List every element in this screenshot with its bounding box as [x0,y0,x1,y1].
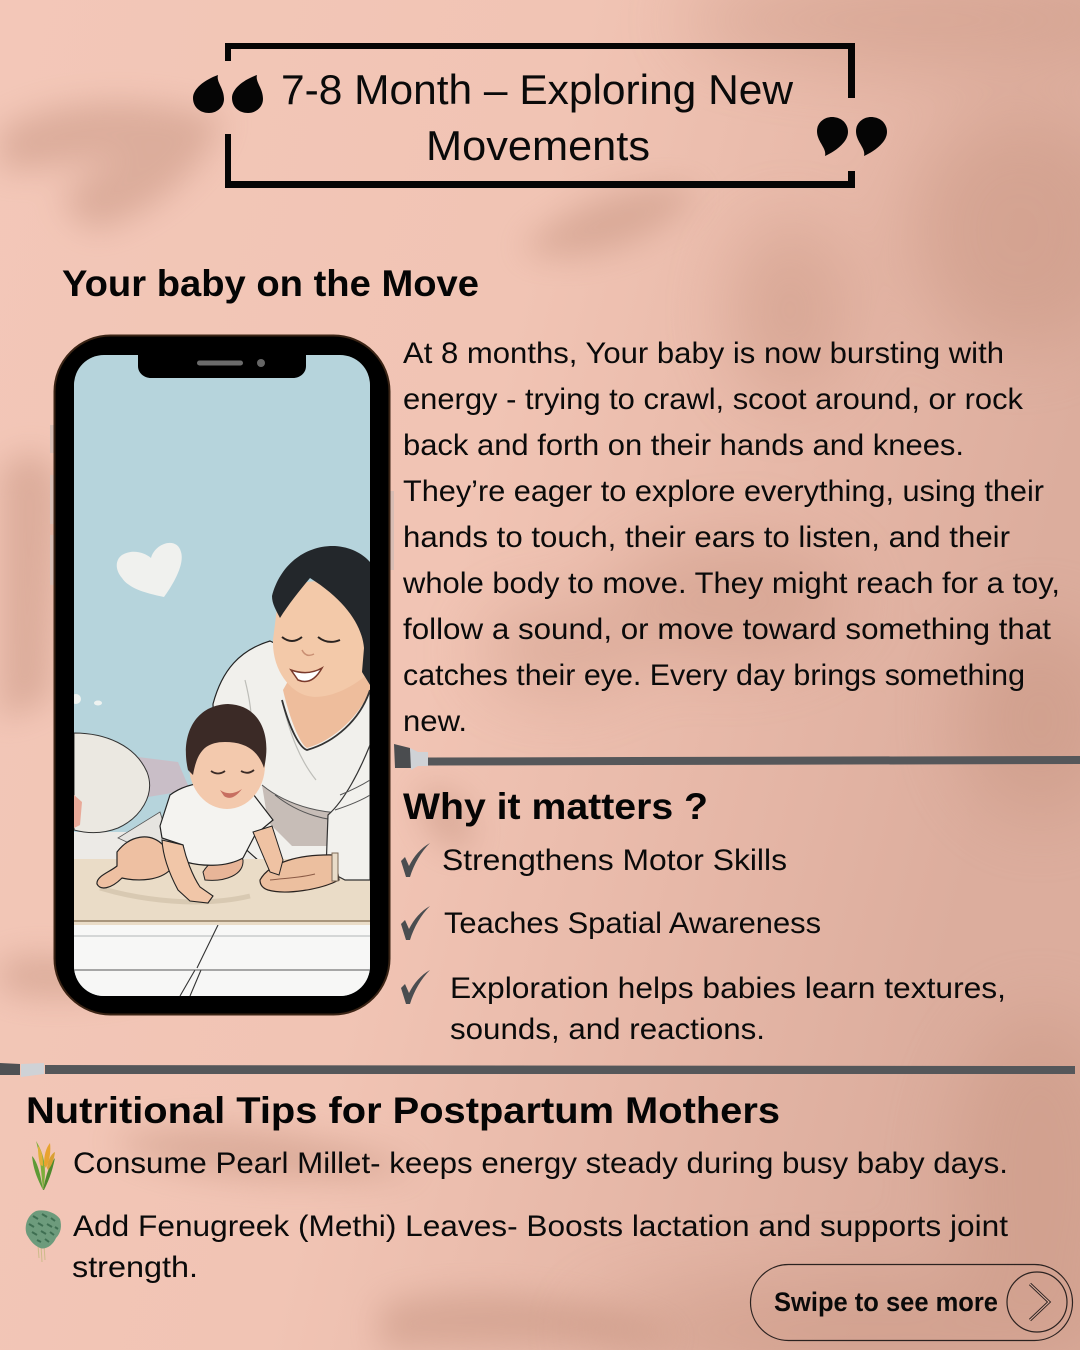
divider 1 [394,744,1080,770]
heading: nutritional tips: Nutritional Tips for Postpartum Mothers [26,1090,780,1131]
icon: check 2 [401,906,430,940]
title [281,66,794,169]
icon: opening quotes [193,75,263,113]
mother eyes and smile [282,637,340,642]
paragraph: follow a sound, or move toward something that [403,613,1052,646]
divider 2 [0,1063,1075,1077]
paragraph: hands to touch, their ears to listen, and their [403,521,1010,554]
list: why it matters: Exploration helps babies learn textures, [450,972,1006,1005]
paragraph [402,337,1060,738]
paragraph: catches their eye. Every day brings something [403,659,1025,692]
paragraph: new. [403,705,467,738]
list: why it matters: Teaches Spatial Awareness [444,907,821,940]
baby head [190,742,265,809]
list: nutritional tips: Add Fenugreek (Methi) Leaves- Boosts lactation and supports joint [73,1210,1009,1243]
paragraph: At 8 months, Your baby is now bursting with [403,337,1004,370]
icon: check 3 [401,970,430,1004]
heart [117,543,182,597]
mother neck [283,676,370,748]
purple cushion [138,757,188,797]
title: Movements [426,122,650,169]
paragraph: whole body to move. They might reach for a toy, [402,567,1060,600]
mother hand [260,855,339,892]
icon: fenugreek [26,1210,61,1262]
list: why it matters [401,843,1006,1046]
baby body [160,782,273,865]
mother sleeve [326,745,370,880]
baby diaper [117,812,170,842]
phone notch [138,355,306,378]
icon: check 1 [401,843,430,877]
list: why it matters: sounds, and reactions. [450,1013,765,1046]
list: why it matters: Strengthens Motor Skills [442,844,787,877]
mother face [273,581,370,697]
swipe button [750,1264,1072,1340]
baby arms [162,840,213,903]
mother waist shading [262,786,330,846]
title frame [225,43,855,188]
icon: arrow [1007,1272,1067,1332]
icon: pearl millet [32,1141,55,1190]
heading: why it matters: Why it matters ? [403,786,708,827]
paragraph: energy - trying to crawl, scoot around, or rock [403,383,1024,416]
mat [74,859,370,925]
paragraph: back and forth on their hands and knees. [403,429,964,462]
paragraph: They’re eager to explore everything, using their [403,475,1044,508]
floor [74,925,370,996]
list: nutritional tips [26,1141,1009,1284]
swipe button: Swipe to see more [774,1287,998,1317]
baby leg [97,837,170,888]
list: nutritional tips: strength. [72,1251,198,1284]
phone with illustration [50,336,394,1014]
list: nutritional tips: Consume Pearl Millet- keeps energy steady during busy baby days. [73,1147,1008,1180]
mother hair [272,546,370,685]
heading: your baby on the move: Your baby on the Move [62,263,479,304]
icon: closing quotes [817,117,887,156]
back mat strip [74,832,256,859]
mother torso [213,641,370,880]
phone body [54,336,390,1014]
phone side buttons [50,425,394,585]
pillow [74,733,150,833]
title: 7-8 Month – Exploring New [281,66,794,113]
illustration: mother and baby [71,355,370,996]
